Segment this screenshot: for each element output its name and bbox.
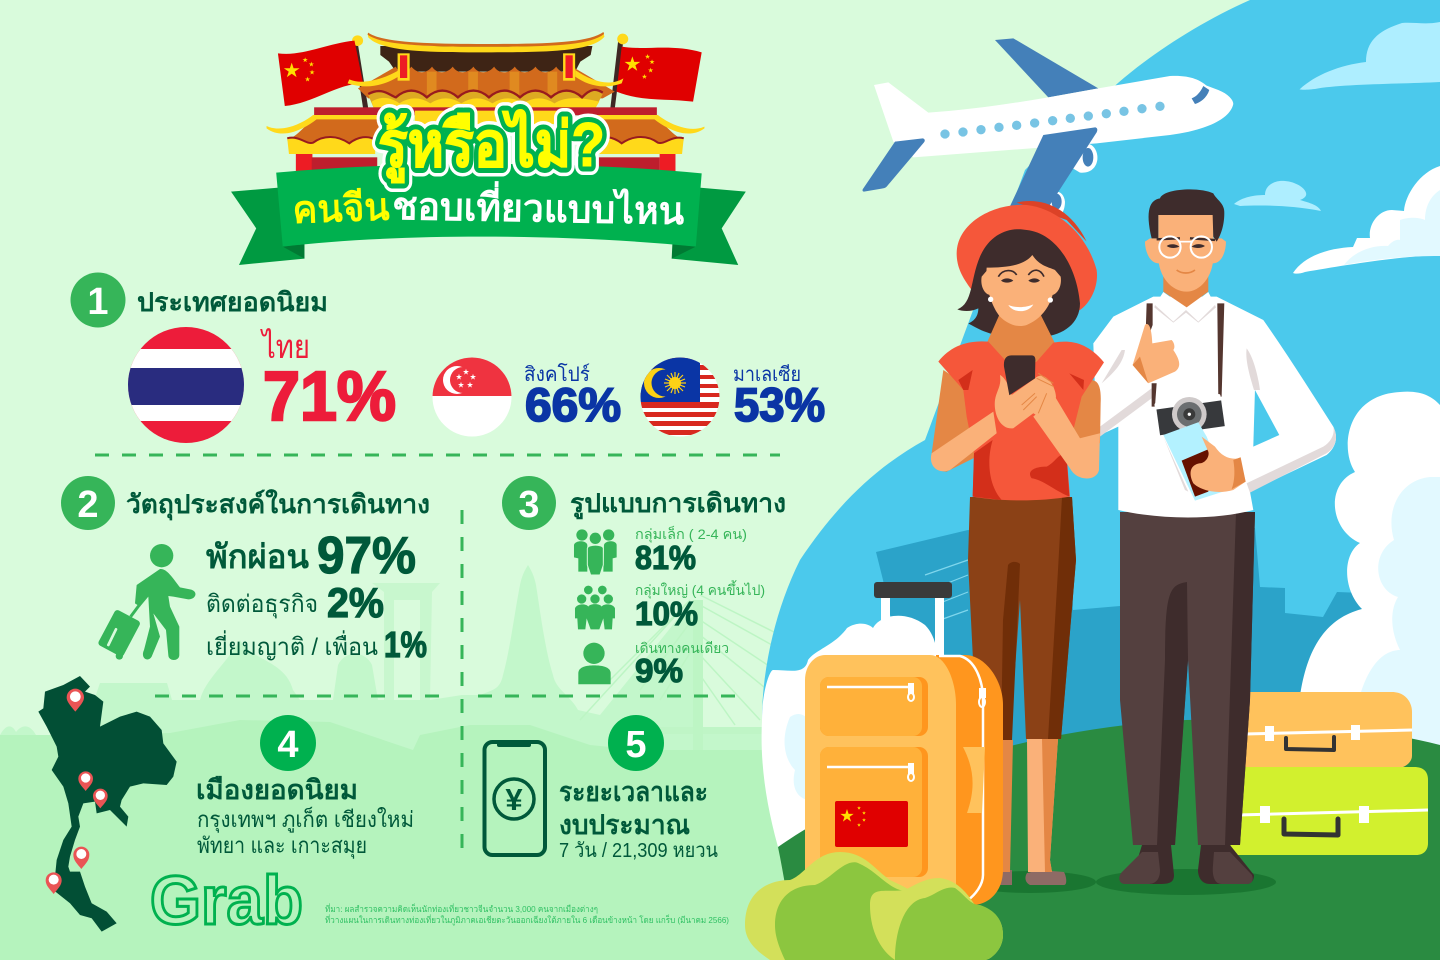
sky clouds <box>1234 22 1440 274</box>
duration text: 7 วัน / 21,309 หยวน <box>559 840 718 862</box>
icon: large group <box>575 586 615 629</box>
sky <box>762 0 1440 960</box>
stat: large group: กลุ่มใหญ่ (4 คนขึ้นไป) <box>635 580 765 599</box>
subheading <box>292 179 685 233</box>
section 2: travel purpose <box>61 476 430 665</box>
flag: Malaysia <box>640 357 720 437</box>
badge 5: 5 <box>625 724 647 766</box>
stat: small group: 81% <box>635 539 696 576</box>
stat: large group: 10% <box>635 595 698 632</box>
source note: ที่มา: ผลสำรวจความคิดเห็นนักท่องเที่ยวชาวจีนจำนวน 3,000 คนจากเมืองต่างๆ <box>325 903 598 914</box>
stat: business: ติดต่อธุรกิจ <box>206 591 318 619</box>
stat: small group <box>635 525 747 576</box>
hill <box>778 720 1440 960</box>
flag: Singapore <box>432 357 512 437</box>
heading 1: ประเทศยอดนิยม <box>137 287 328 317</box>
clouds right and left <box>762 392 1440 860</box>
gate illustration <box>231 32 746 265</box>
heading 2: วัตถุประสงค์ในการเดินทาง <box>126 489 430 521</box>
suitcase <box>805 582 1003 905</box>
stat: visit relatives: 1% <box>384 624 427 665</box>
cities: กรุงเทพฯ ภูเก็ต เชียงใหม่ <box>197 805 414 833</box>
bushes <box>745 852 1003 960</box>
stat: solo: 9% <box>635 652 683 689</box>
Singapore stat: 66% <box>525 378 621 431</box>
icon: phone with yuan <box>484 741 545 855</box>
title banner <box>231 32 746 265</box>
stat: leisure: พักผ่อน <box>206 538 309 575</box>
heading: รู้หรือไม่? <box>378 109 605 183</box>
section dividers <box>95 455 780 855</box>
stat: solo: เดินทางคนเดียว <box>635 640 729 656</box>
heading 3: รูปแบบการเดินทาง <box>570 488 786 520</box>
distant city <box>876 528 1380 760</box>
badge 4: 4 <box>277 724 299 766</box>
Thailand stat: ไทย <box>260 328 310 365</box>
badge 4 <box>260 715 316 771</box>
cities: พัทยา และ เกาะสมุย <box>197 833 367 859</box>
background skyline <box>0 565 790 960</box>
subheading: คนจีน <box>292 187 390 232</box>
shadows <box>964 869 1276 895</box>
icon: phone with yuan: ¥ <box>505 782 523 817</box>
badge 1: 1 <box>87 281 109 323</box>
Thailand stat <box>260 328 396 435</box>
section 3: travel style <box>502 476 786 689</box>
section 5: duration and budget <box>484 715 718 862</box>
Malaysia stat: มาเลเซีย <box>733 364 801 386</box>
stat: business: 2% <box>327 579 384 626</box>
Malaysia stat: 53% <box>734 378 825 431</box>
stat: leisure: 97% <box>317 527 416 585</box>
Singapore stat: สิงคโปร์ <box>524 363 590 386</box>
woman <box>931 201 1104 885</box>
Thailand stat: 71% <box>263 357 396 435</box>
man <box>1093 189 1336 884</box>
badge 5 <box>608 715 664 771</box>
subheading: ชอบเที่ยวแบบไหน <box>392 179 685 233</box>
section 4: popular cities <box>196 715 414 859</box>
cities <box>197 805 414 859</box>
map of Thailand with pins <box>38 676 177 932</box>
plane <box>863 38 1233 220</box>
section 1: popular countries <box>70 272 825 443</box>
Grab logo: Grab <box>150 862 303 939</box>
badge 1 <box>70 272 126 328</box>
stat: solo <box>635 640 729 689</box>
stat: leisure <box>206 527 416 585</box>
badge 2 <box>61 476 115 530</box>
stat: small group: กลุ่มเล็ก ( 2-4 คน) <box>635 525 747 543</box>
badge 2: 2 <box>77 484 99 526</box>
heading 5 <box>559 777 708 840</box>
case stack <box>1230 692 1428 855</box>
source note: ที่วางแผนในการเดินทางท่องเที่ยวในภูมิภาคเอเชียตะวันออกเฉียงใต้ภายใน 6 เดือนข้างหน้า โดย แกร็บ (มีนาคม 2566) <box>325 914 729 926</box>
icon: solo <box>578 643 611 684</box>
stat: visit relatives: เยี่ยมญาติ / เพื่อน <box>206 630 378 661</box>
stat: visit relatives <box>206 624 427 665</box>
heading 4: เมืองยอดนิยม <box>196 775 358 805</box>
source note <box>325 903 729 926</box>
heading 5: ระยะเวลาและ <box>559 777 708 807</box>
icon: small group <box>574 529 617 575</box>
heading: รู้หรือไม่? <box>378 109 605 183</box>
heading: รู้หรือไม่? <box>378 109 605 183</box>
badge 3 <box>502 476 556 530</box>
badge 3: 3 <box>518 484 540 526</box>
icon: traveller <box>97 544 195 660</box>
stat: business <box>206 579 384 626</box>
flag: Thailand <box>128 327 244 443</box>
heading 5: งบประมาณ <box>559 810 690 840</box>
stat: large group <box>635 580 765 632</box>
sticker: China flag <box>835 801 908 847</box>
